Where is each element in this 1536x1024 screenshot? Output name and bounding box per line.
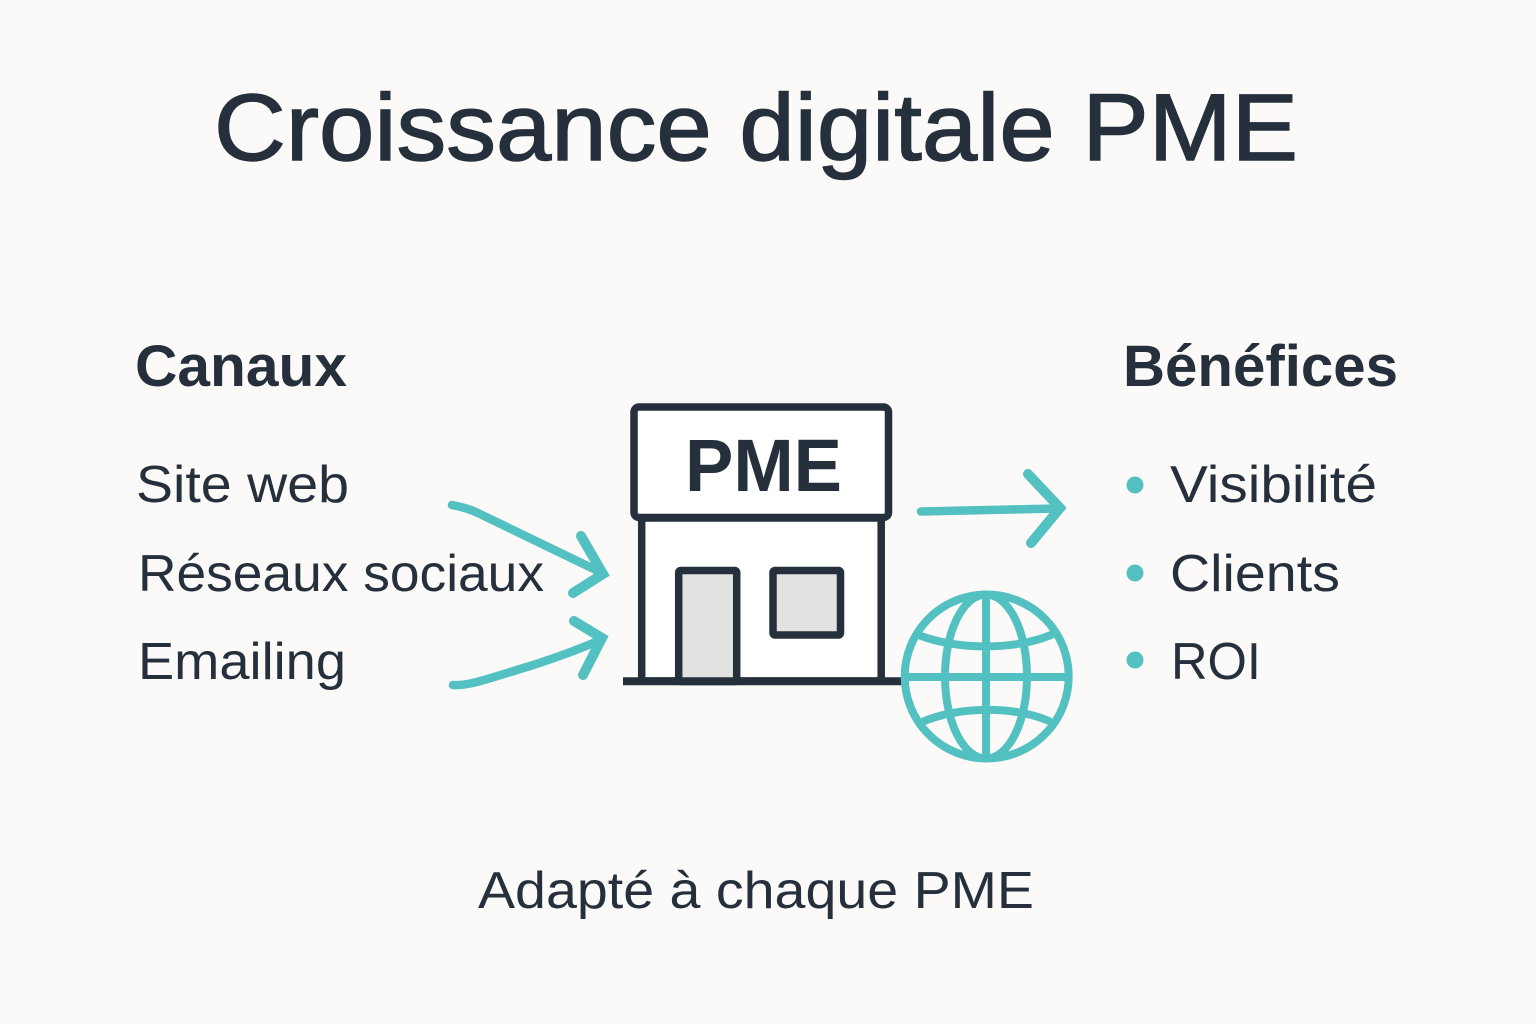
panel: bénéfices — [1123, 334, 1398, 691]
text: clients: Clients — [1170, 545, 1340, 603]
bullet: clients — [1126, 564, 1144, 582]
window — [773, 570, 840, 635]
bullet: visibilité — [1126, 476, 1144, 494]
arrow: emailing to PME — [453, 621, 602, 685]
text: site web: Site web — [136, 456, 349, 514]
caption: Adapté à chaque PME — [478, 862, 1034, 920]
text: réseaux sociaux: Réseaux sociaux — [138, 545, 544, 603]
heading: bénéfices: Bénéfices — [1123, 334, 1398, 399]
title: Croissance digitale PME — [214, 75, 1298, 181]
sign label: PME — [685, 424, 842, 507]
icon: globe — [905, 594, 1069, 758]
text: emailing: Emailing — [138, 633, 346, 691]
building body — [642, 518, 881, 681]
ground line — [623, 677, 903, 685]
panel: canaux — [135, 334, 544, 691]
text: ROI: ROI — [1171, 633, 1261, 691]
heading: canaux: Canaux — [135, 334, 347, 399]
arrow: PME to bénéfices — [921, 474, 1060, 543]
icon: PME building — [623, 407, 903, 682]
door — [679, 570, 737, 682]
text: visibilité: Visibilité — [1170, 456, 1377, 514]
arrow: site web and réseaux to PME — [452, 505, 603, 593]
building sign — [634, 407, 888, 518]
bullet: ROI — [1126, 652, 1144, 668]
